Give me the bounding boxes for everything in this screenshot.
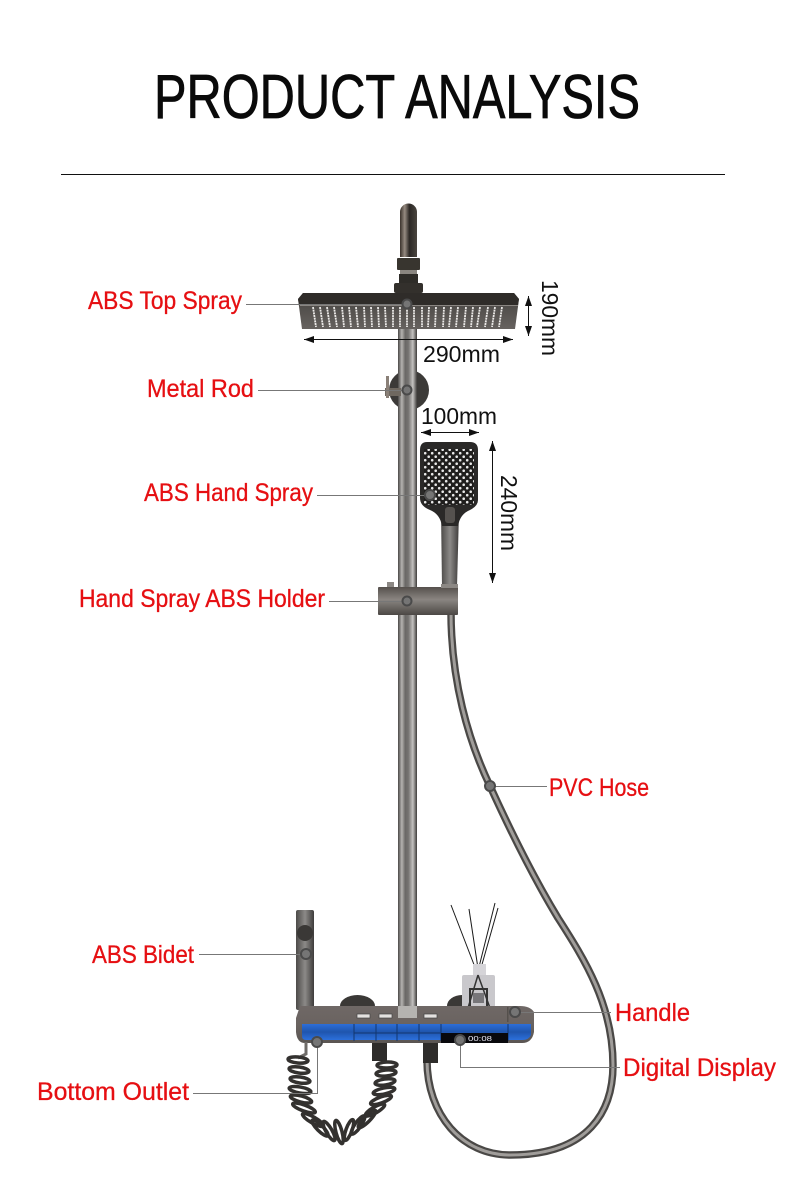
icon: spiral bidet hose — [288, 1042, 397, 1144]
icon: wall bracket — [385, 370, 429, 412]
callout: ABS Hand Spray — [144, 479, 435, 507]
spray nozzle stripes — [313, 307, 502, 327]
icon: shelf mixer panel — [296, 995, 534, 1043]
callout: ABS Top Spray: ABS Top Spray — [88, 287, 242, 315]
icon: bidet sprayer — [296, 910, 314, 1010]
callout: Bottom Outlet: Bottom Outlet — [37, 1078, 189, 1106]
callout: ABS Bidet: ABS Bidet — [92, 941, 194, 969]
icon: hand spray holder — [378, 582, 458, 615]
callout: Bottom Outlet — [37, 1037, 322, 1106]
icon: outlet pipes — [372, 1043, 438, 1063]
callout: ABS Bidet — [92, 941, 311, 969]
callout: PVC Hose: PVC Hose — [549, 774, 649, 802]
callout: Digital Display — [455, 1035, 776, 1082]
digital display: 00:08 — [468, 1036, 492, 1043]
callout: Metal Rod — [147, 375, 412, 403]
icon: main rod — [398, 328, 417, 1010]
callout: Metal Rod: Metal Rod — [147, 375, 254, 403]
callout: Handle — [510, 999, 690, 1027]
dimension: 290mm: 290mm — [423, 341, 500, 367]
dimension: 100mm: 100mm — [421, 403, 497, 429]
icon: flexible hose — [427, 612, 613, 1155]
icon: hand spray — [420, 442, 478, 587]
icon: reed diffuser — [451, 903, 498, 1018]
callout: ABS Top Spray — [88, 287, 412, 315]
digital display — [441, 1033, 508, 1043]
dimension: 190mm: 190mm — [537, 280, 563, 356]
callout: ABS Hand Spray: ABS Hand Spray — [144, 479, 313, 507]
dimension: 240mm: 240mm — [496, 475, 522, 551]
callout: PVC Hose — [485, 774, 649, 802]
title: PRODUCT ANALYSIS — [154, 63, 640, 132]
callout: Handle: Handle — [615, 999, 690, 1027]
blue glass panel — [302, 1024, 531, 1040]
callout: Hand Spray ABS Holder: Hand Spray ABS Holder — [79, 585, 325, 613]
callout: Digital Display: Digital Display — [623, 1054, 776, 1082]
icon: top spray head — [298, 204, 519, 329]
